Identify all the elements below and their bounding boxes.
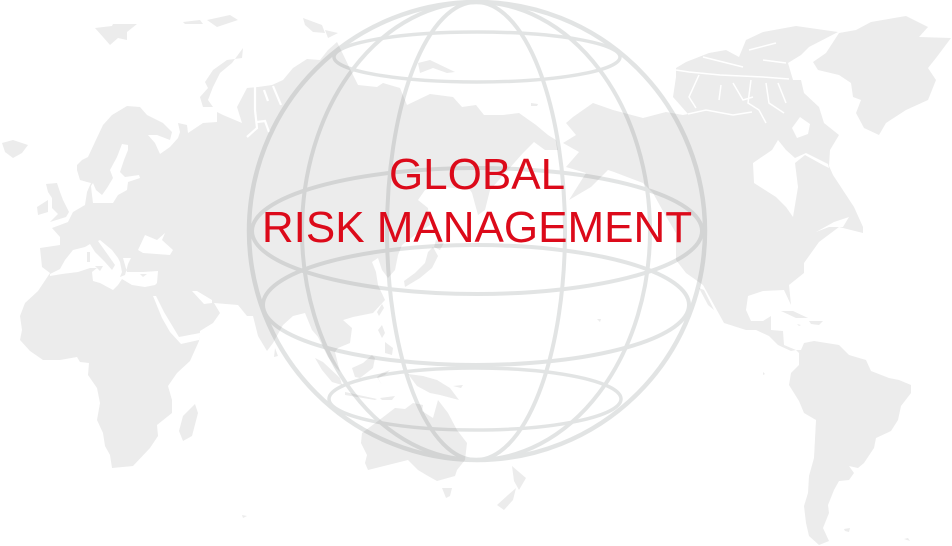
- islands: New Zealand: [497, 466, 526, 510]
- sea cutout: Hudson Bay: [753, 140, 829, 217]
- sea cutout: Persian Gulf: [192, 291, 212, 304]
- channels: Canadian Arctic: [676, 43, 789, 123]
- islands: Baja California and Caribbean: [699, 288, 823, 326]
- landmass: South America: [789, 341, 911, 545]
- islands: South Atlantic: [844, 528, 910, 541]
- wireframe globe: [249, 2, 705, 460]
- sea cutout: Mediterranean: [50, 240, 158, 290]
- islands: New Guinea and New Britain: [408, 374, 463, 400]
- latitude ring: top: [334, 32, 620, 82]
- latitude ring: lower middle: [263, 245, 689, 365]
- inlets: Siberian arctic coast: [247, 86, 281, 137]
- islands: Japan and Taiwan: [377, 240, 444, 316]
- sea cutout: Baltic: [91, 144, 140, 203]
- sea cutout: Red Sea and Gulf of Aden: [153, 296, 200, 344]
- sea cutout: Gulf of St Lawrence: [816, 217, 849, 232]
- island: Tasmania: [442, 488, 452, 498]
- landmass: North America and Canadian Arctic: [563, 26, 863, 351]
- landmass: Australia: [361, 400, 467, 481]
- islands: Mediterranean: [87, 252, 147, 277]
- globe outline: [249, 2, 705, 460]
- meridians: outer: [302, 2, 650, 460]
- islands: small oceanic: [242, 319, 765, 518]
- title line 2: RISK MANAGEMENT: [262, 203, 692, 252]
- sea cutout: Foxe Basin: [792, 117, 810, 138]
- islands: Arctic Europe and Siberia: [95, 15, 538, 107]
- island: Madagascar: [179, 404, 198, 441]
- islands: British Isles: [37, 183, 69, 222]
- landmass: Eurasia and Africa: [20, 42, 558, 468]
- island: Sri Lanka: [274, 348, 278, 357]
- latitude ring: upper middle: [252, 168, 702, 294]
- island: Iceland: [2, 140, 28, 158]
- latitude ring: bottom: [329, 368, 621, 430]
- meridians: inner: [387, 2, 565, 460]
- islands: Southeast Asia: [315, 325, 395, 400]
- title line 1: GLOBAL: [389, 150, 565, 199]
- landmass: Greenland: [813, 16, 951, 135]
- title: [262, 150, 692, 252]
- sea cutout: Black Sea: [138, 233, 173, 255]
